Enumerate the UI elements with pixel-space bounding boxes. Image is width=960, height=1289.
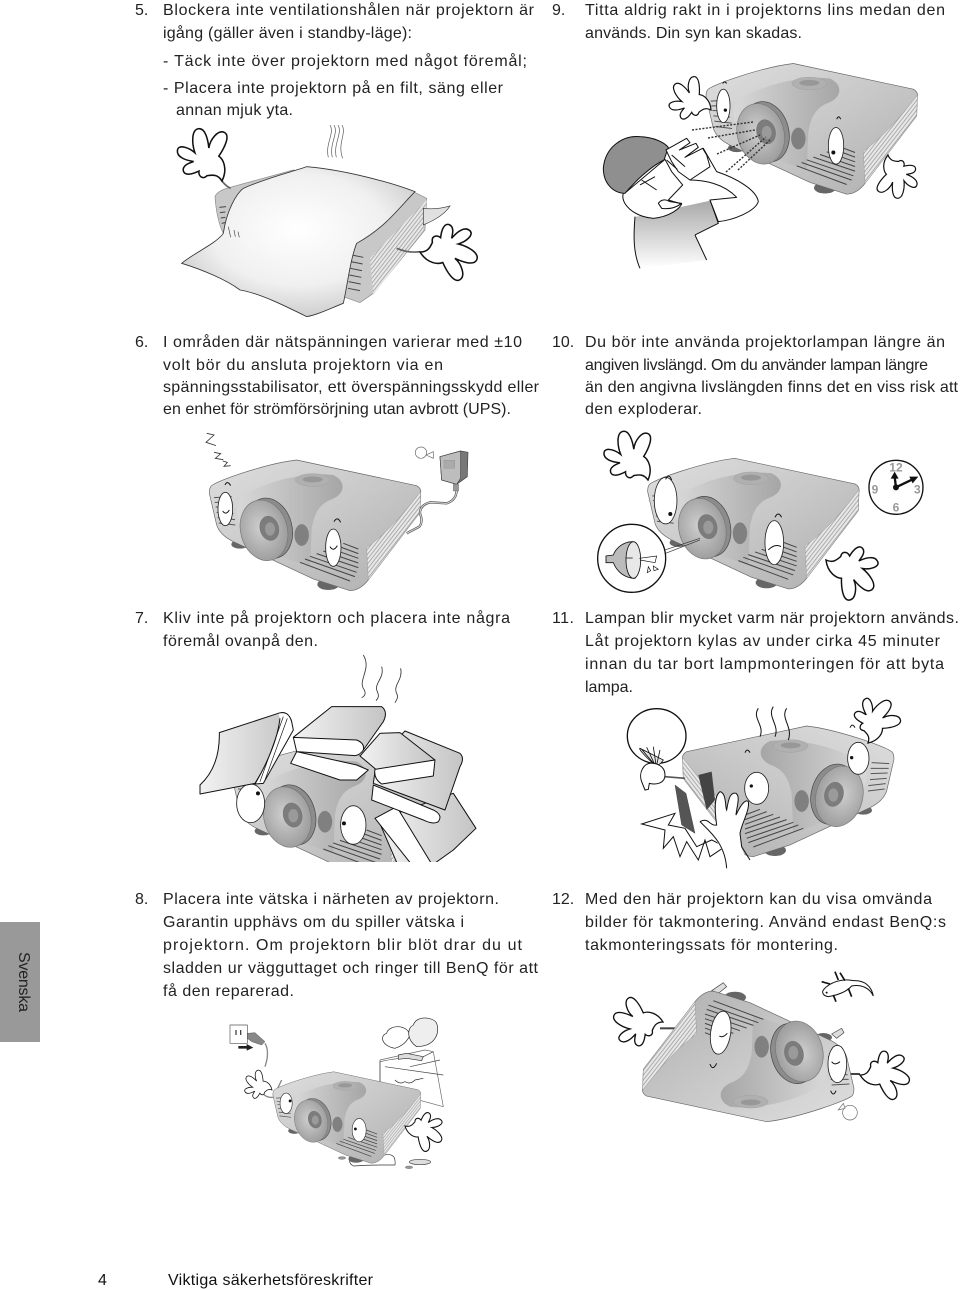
icon: clock (869, 460, 923, 515)
item 5 text: annan mjuk yta. (176, 102, 293, 119)
item 10 text: Du bör inte använda projektorlampan längre än (585, 334, 945, 351)
item 12 text: 12. (552, 891, 574, 908)
item 8 text (135, 891, 539, 1000)
icon: clock: 3 (914, 482, 921, 496)
item 8 text: Garantin upphävs om du spiller vätska i (163, 914, 464, 931)
item 10 text: angiven livslängd. Om du använder lampan längre (585, 357, 928, 374)
item 8 text: 8. (135, 891, 148, 908)
illustration: books stacked on projector (200, 655, 476, 877)
item 6 text (135, 333, 540, 418)
item 8 text: projektorn. Om projektorn blir blöt drar du ut (163, 937, 523, 954)
item 9 text: 9. (552, 2, 565, 19)
item 10 text: än den angivna livslängden finns det en viss risk att (585, 379, 959, 396)
item 9 text: Titta aldrig rakt in i projektorns lins medan den (585, 2, 945, 19)
item 7 text: Kliv inte på projektorn och placera inte några (163, 609, 510, 627)
item 5 text: Blockera inte ventilationshålen när projektorn är (163, 1, 535, 19)
item 11 text: lampa. (585, 679, 633, 696)
icon: clock: 12 (889, 460, 903, 474)
side tab: Svenska (0, 922, 40, 1042)
item 5 text: - Täck inte över projektorn med något föremål; (163, 52, 527, 70)
illustration: projector with exploding lamp and clock (598, 430, 923, 603)
item 5 text: - Placera inte projektorn på en filt, säng eller (163, 79, 504, 97)
item 8 text: få den reparerad. (163, 982, 294, 1000)
item 12 text: takmonteringssats för montering. (585, 937, 838, 954)
item 11 text: Lampan blir mycket varm när projektorn används. (585, 610, 959, 627)
item 10 text: 10. (552, 334, 574, 351)
icon: clock: 6 (893, 501, 900, 515)
illustration: person shielding eyes from projector lens (603, 63, 923, 268)
item 10 text: den exploderar. (585, 401, 702, 418)
item 8 text: sladden ur vägguttaget och ringer till BenQ för att (163, 960, 539, 977)
item 12 text: bilder för takmontering. Använd endast BenQ:s (585, 914, 946, 931)
illustration: ceiling-mounted upside-down projector with gecko (604, 972, 919, 1122)
icon: clock: 9 (872, 482, 879, 496)
illustration: projector covered by blanket (174, 125, 488, 317)
side tab: Svenska: Svenska (15, 952, 32, 1012)
icon: lamp inset (598, 524, 700, 592)
illustration: wet projector unplugged from wall (230, 1018, 451, 1169)
item 5 text (135, 1, 535, 119)
item 6 text: I områden där nätspänningen varierar med ±10 (163, 333, 522, 351)
item 7 text: 7. (135, 610, 148, 627)
item 6 text: spänningsstabilisator, ett överspänningsskydd eller (163, 379, 540, 396)
item 12 text: Med den här projektorn kan du visa omvända (585, 891, 932, 908)
item 12 text (552, 891, 946, 954)
item 5 text: igång (gäller även i standby-läge): (163, 24, 412, 42)
item 11 text: innan du tar bort lampmonteringen för att byta (585, 656, 944, 673)
item 9 text: används. Din syn kan skadas. (585, 25, 802, 42)
illustration: hot projector with fan and warning hand (627, 689, 903, 868)
illustration: sleeping projector with UPS adapter (206, 433, 468, 591)
item 7 text: föremål ovanpå den. (163, 632, 318, 650)
item 6 text: volt bör du ansluta projektorn via en (163, 357, 443, 374)
item 11 text: Låt projektorn kylas av under cirka 45 minuter (585, 632, 941, 650)
footer: page number and section title: 4 (98, 1272, 107, 1289)
item 9 text (552, 2, 945, 42)
item 10 text (552, 334, 959, 418)
item 7 text (135, 609, 510, 650)
item 11 text (552, 610, 959, 696)
item 8 text: Placera inte vätska i närheten av projektorn. (163, 891, 499, 908)
item 6 text: en enhet för strömförsörjning utan avbrott (UPS). (163, 401, 511, 418)
footer: page number and section title: Viktiga säkerhetsföreskrifter (168, 1272, 374, 1289)
item 5 text: 5. (135, 2, 148, 19)
item 11 text: 11. (552, 610, 574, 627)
item 6 text: 6. (135, 334, 148, 351)
